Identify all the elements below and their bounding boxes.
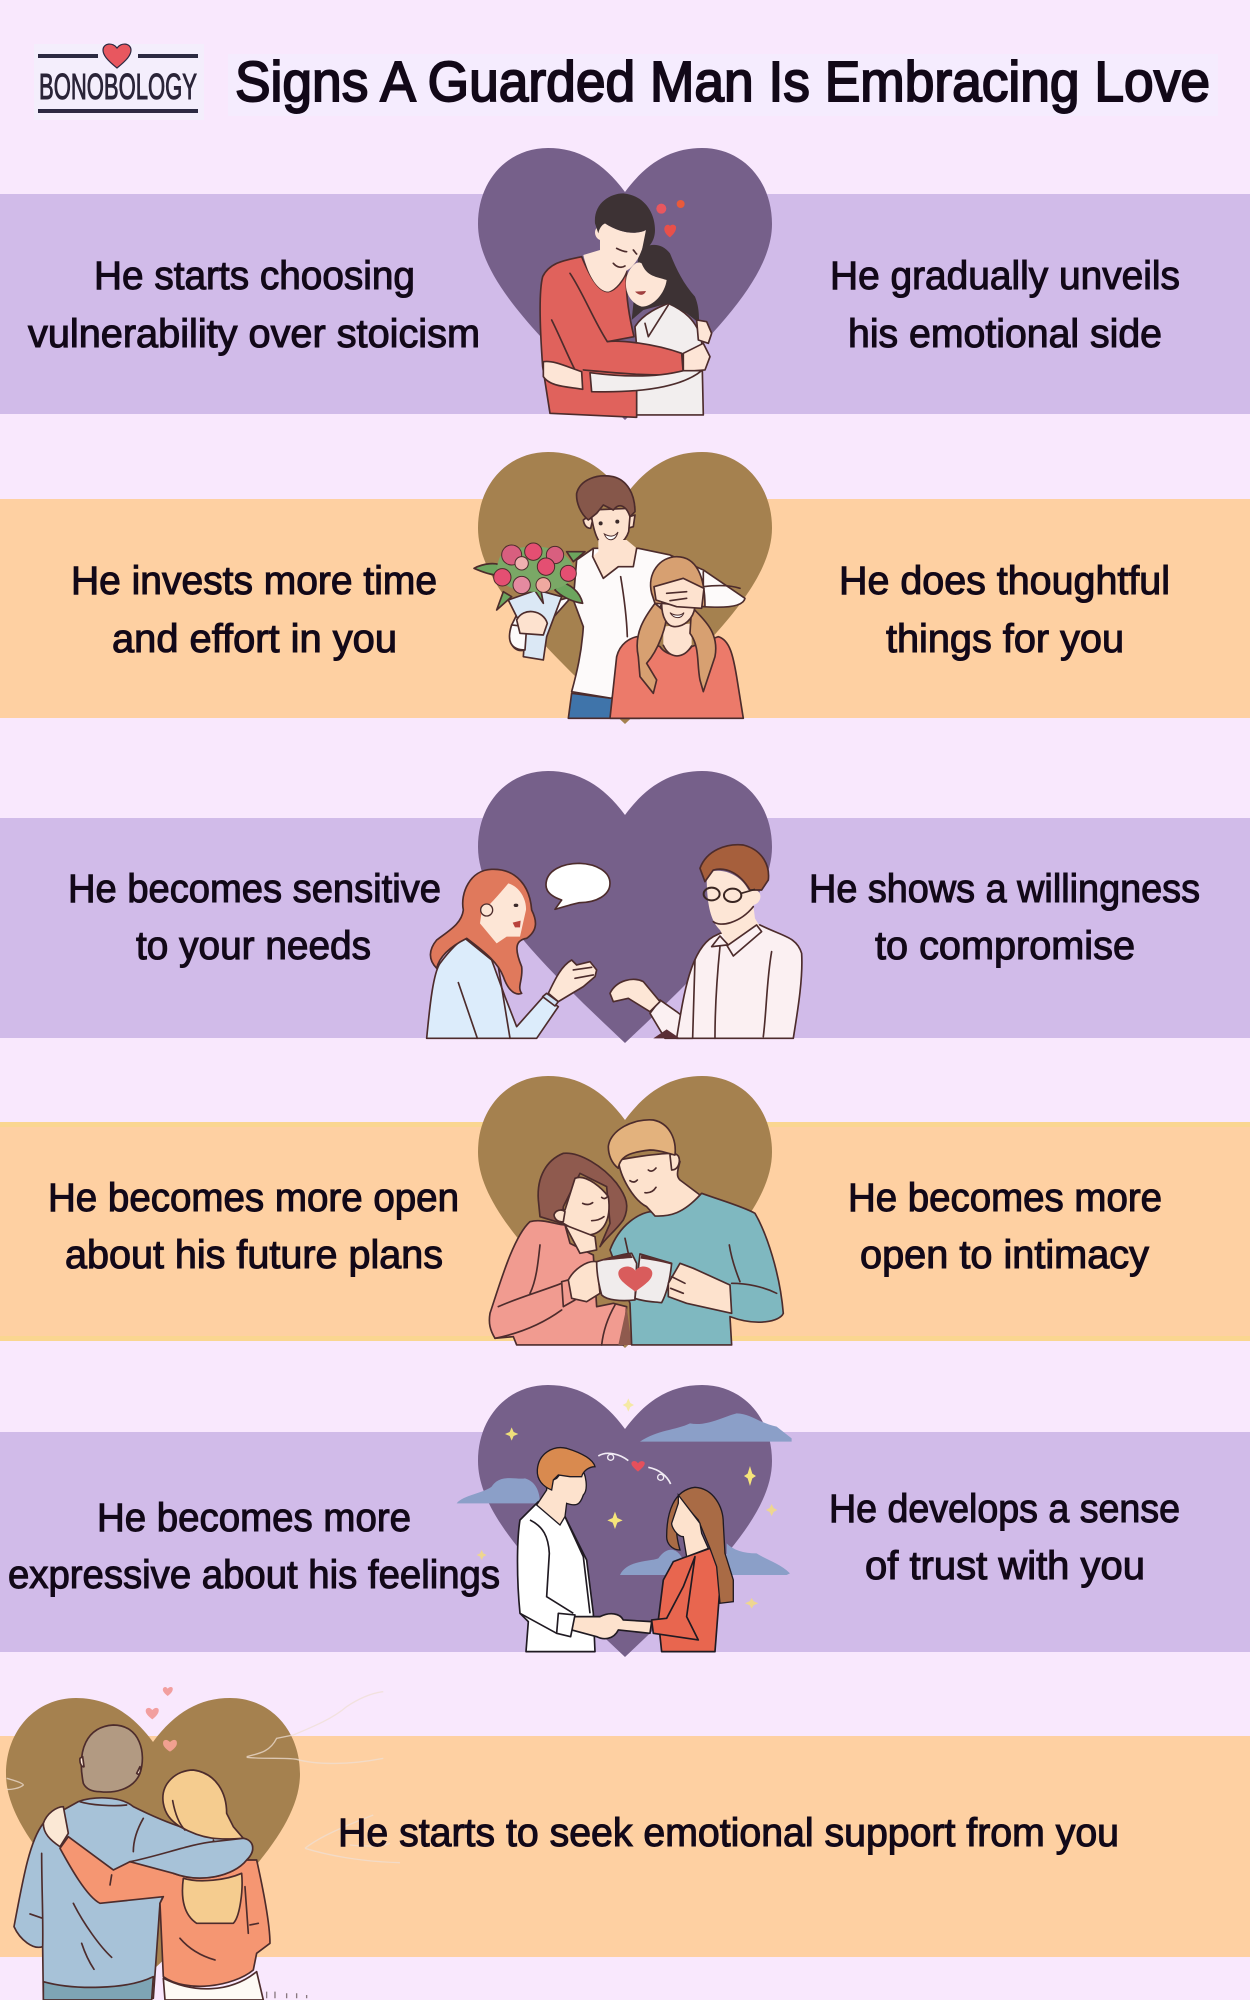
text: left: expressive about his feelings [8, 1553, 500, 1597]
text: left: He becomes more open [48, 1176, 459, 1220]
text: right: of trust with you [865, 1544, 1145, 1588]
header [34, 44, 1218, 120]
illustration: couple holding hands under stars [457, 1398, 792, 1652]
text: right [830, 254, 1180, 356]
band [0, 1432, 1250, 1652]
panel: row 5 [0, 1385, 1250, 1657]
panel: row 1 [0, 148, 1250, 420]
illustration: man with bouquet [474, 476, 745, 718]
panel: row 3 [0, 771, 1250, 1043]
band [0, 499, 1250, 718]
text: He starts to seek emotional support from you [338, 1811, 1119, 1855]
text: right: open to intimacy [860, 1233, 1149, 1277]
logo: Bonobology [34, 44, 204, 120]
text: right: He shows a willingness [809, 867, 1200, 911]
text: left [68, 867, 441, 968]
panel: row 2 [0, 452, 1250, 724]
text: left: He becomes sensitive [68, 867, 441, 911]
text: left: vulnerability over stoicism [28, 312, 480, 356]
heart [478, 1076, 772, 1348]
heart [478, 148, 772, 420]
text: right: things for you [886, 617, 1124, 661]
text: left: He invests more time [71, 559, 437, 603]
title: Signs A Guarded Man Is Embracing Love [235, 50, 1210, 114]
text: left: He becomes more [97, 1496, 411, 1540]
text: left: He starts choosing [94, 254, 415, 298]
text: right: He develops a sense [829, 1487, 1180, 1531]
heart [478, 1385, 772, 1657]
band [0, 818, 1250, 1038]
illustration: couple from behind [7, 1687, 400, 2000]
text: right: to compromise [875, 924, 1135, 968]
text: left: to your needs [136, 924, 371, 968]
text: left: about his future plans [65, 1233, 443, 1277]
band [0, 194, 1250, 414]
panel: row 4 [0, 1076, 1250, 1348]
band [0, 1736, 1250, 1957]
text: left: and effort in you [112, 617, 397, 661]
text: left [8, 1496, 500, 1597]
illustration: couple with mugs [489, 1120, 783, 1345]
text: left [28, 254, 480, 356]
text: right [829, 1487, 1180, 1588]
heart [478, 452, 772, 724]
panel: row 6 [0, 1687, 1250, 2000]
illustration: couple talking [427, 845, 802, 1038]
text: right: his emotional side [848, 312, 1162, 356]
text: left [48, 1176, 459, 1277]
band highlight [0, 1122, 1250, 1341]
illustration: hugging couple [540, 193, 712, 417]
text: left [71, 559, 437, 661]
heart [478, 771, 772, 1043]
text: right [809, 867, 1200, 968]
text: right: He gradually unveils [830, 254, 1180, 298]
text: right: He does thoughtful [839, 559, 1170, 603]
text: right [839, 559, 1170, 661]
text: right: He becomes more [848, 1176, 1162, 1220]
text: right [848, 1176, 1162, 1277]
heart [6, 1698, 300, 1970]
title haze [228, 54, 1218, 116]
logo: Bonobology: BONOBOLOGY [39, 66, 197, 107]
band [0, 1122, 1250, 1341]
